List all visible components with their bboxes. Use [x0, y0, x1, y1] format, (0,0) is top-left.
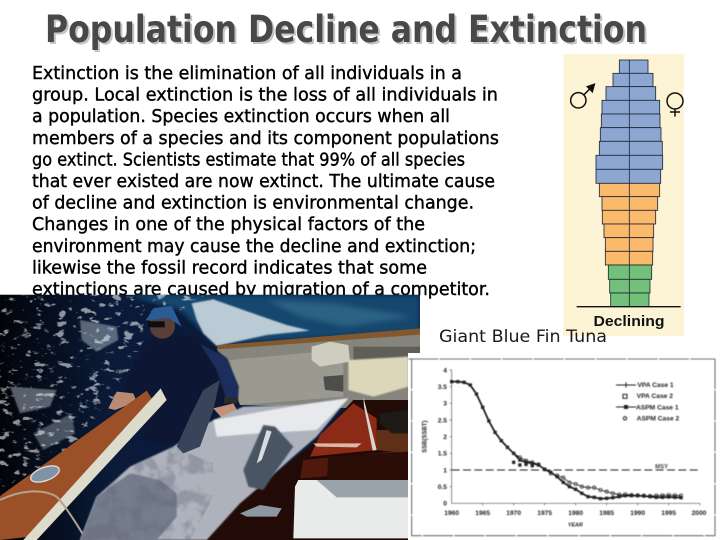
white cushion [240, 480, 408, 538]
text block: extinction explanation [32, 63, 499, 300]
series: ASPM case 2 [514, 453, 681, 496]
y axis labels: 3.5 [438, 384, 447, 391]
text block: extinction explanation: members of a species and its component populations [32, 128, 499, 149]
axes [450, 370, 700, 505]
x axis labels: 1985 [599, 510, 614, 517]
panel: declining population pyramid [563, 54, 684, 336]
legend [616, 382, 680, 422]
y axis labels: 0 [443, 501, 447, 508]
y axis labels: 0.5 [438, 484, 447, 491]
x axis labels: 1970 [506, 510, 521, 517]
x axis labels [444, 510, 707, 517]
legend: ASPM Case 1 [636, 404, 679, 411]
y axis labels: 2.5 [438, 417, 447, 424]
y axis labels: 3 [443, 401, 447, 408]
chart frame [408, 359, 715, 536]
y axis labels [438, 367, 447, 508]
tuna [77, 380, 362, 540]
text block: extinction explanation: of decline and extinction is environmental change. [32, 193, 474, 214]
x axis title: YEAR [568, 523, 583, 529]
y axis labels: 1.5 [438, 451, 447, 458]
y axis labels: 1 [443, 467, 447, 474]
text block: extinction explanation: a population. Species extinction occurs when all [32, 106, 450, 127]
angler [108, 306, 240, 418]
x axis labels: 1960 [444, 510, 459, 517]
x axis labels: 1980 [568, 510, 583, 517]
y axis title: SSB(SSBT) [422, 421, 428, 453]
x axis labels: 2000 [692, 510, 707, 517]
text block: extinction explanation: extinctions are caused by migration of a competitor. [32, 279, 490, 300]
text block: extinction explanation: Changes in one of the physical factors of the [32, 214, 425, 235]
legend: ASPM Case 2 [637, 415, 680, 422]
sea [0, 295, 420, 540]
legend: VPA Case 2 [637, 393, 673, 400]
pyramid bars [596, 60, 663, 307]
x axis labels: 1990 [630, 510, 645, 517]
wooden gunwale [0, 388, 167, 540]
y axis labels: 4 [443, 367, 447, 374]
text block: extinction explanation: likewise the fossil record indicates that some [32, 257, 427, 278]
y axis labels: 2 [443, 434, 447, 441]
chair and towel [312, 342, 408, 451]
x axis labels: 1965 [475, 510, 490, 517]
text block: extinction explanation: Extinction is the elimination of all individuals in a [32, 63, 462, 84]
label: declining: Declining [593, 314, 664, 330]
text block: extinction explanation: environment may cause the decline and extinction; [32, 236, 476, 257]
baseline [577, 305, 681, 309]
x axis labels: 1995 [661, 510, 676, 517]
panel: SSB line chart [408, 353, 720, 540]
legend: VPA Case 1 [637, 382, 674, 389]
text block: extinction explanation: that ever existed are now extinct. The ultimate cause [32, 171, 495, 192]
text block: extinction explanation: group. Local extinction is the loss of all individuals in [32, 85, 498, 106]
icon: male symbol [571, 84, 594, 108]
photo: angler with giant tuna on boat [0, 295, 420, 540]
MSY dashed line: MSY [655, 464, 668, 470]
series: VPA case 2 [514, 462, 538, 466]
icon: female symbol [667, 93, 683, 117]
caption: giant blue fin tuna: Giant Blue Fin Tuna [439, 327, 607, 347]
x axis labels: 1975 [537, 510, 552, 517]
deck [187, 400, 420, 540]
boat cabin and upper rail [217, 328, 420, 410]
text block: extinction explanation: go extinct. Scientists estimate that 99% of all species [32, 149, 465, 170]
series: ASPM case 1 [452, 382, 681, 499]
